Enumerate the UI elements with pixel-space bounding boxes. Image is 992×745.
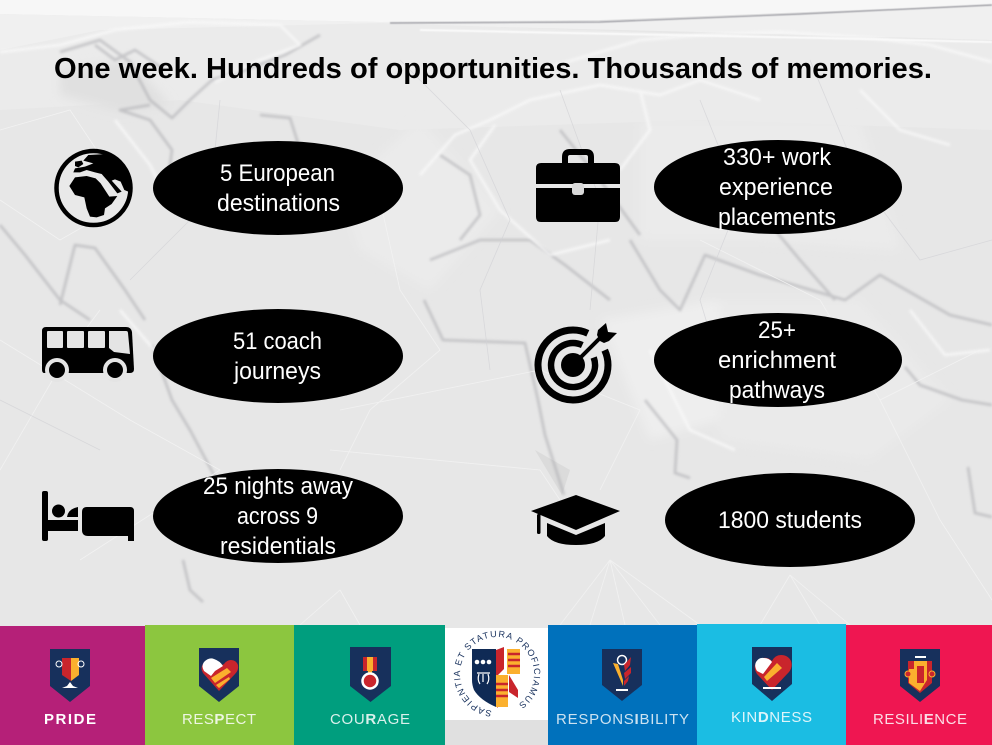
oval: 25 nights away across 9 residentials: across 9 [237, 503, 318, 530]
oval: 330+ work experience placements: 330+ work [723, 144, 832, 171]
grey creases [0, 35, 992, 602]
oval: 1800 students [665, 473, 915, 567]
oval: 1800 students: 1800 students [718, 507, 862, 534]
oval: 51 coach journeys: 51 coach [233, 328, 322, 355]
panel: responsibility: RESPONSIBILITY [556, 711, 689, 728]
icon: target with arrow [538, 323, 617, 400]
icon: briefcase [536, 149, 620, 222]
oval: 51 coach journeys: journeys [233, 358, 321, 385]
panel: kindness [697, 624, 846, 745]
oval: 330+ work experience placements [654, 140, 902, 234]
oval: 5 European destinations [153, 141, 403, 235]
oval: 330+ work experience placements: placements [718, 204, 836, 231]
panel: responsibility [548, 625, 697, 745]
panel: pride: PRIDE [44, 711, 96, 728]
panel: courage [294, 625, 445, 745]
panel: respect [145, 625, 294, 745]
oval: 25+ enrichment pathways [654, 313, 902, 407]
oval: 330+ work experience placements: experience [719, 174, 833, 201]
oval: 25 nights away across 9 residentials [153, 469, 403, 563]
icon: globe [56, 151, 132, 225]
values banner [0, 624, 992, 745]
oval: 25+ enrichment pathways: pathways [729, 377, 825, 404]
oval: 25+ enrichment pathways: 25+ [758, 317, 796, 344]
panel: courage: COURAGE [330, 711, 410, 728]
thin facet lines [0, 110, 992, 625]
oval: 5 European destinations: destinations [217, 190, 340, 217]
top band shadow [390, 5, 992, 23]
panel: resilience [846, 625, 992, 745]
icon: bed [42, 491, 134, 541]
panel: resilience: RESILIENCE [873, 711, 967, 728]
oval: 51 coach journeys [153, 309, 403, 403]
title: One week. Hundreds of opportunities. Thousands of memories. [54, 53, 932, 85]
panel: school crest: SAPIENTIA ET STATURA PROFICIAMUS [454, 630, 540, 716]
oval: 5 European destinations: 5 European [220, 160, 335, 187]
white creases [0, 22, 992, 450]
oval: 25 nights away across 9 residentials: residentials [220, 533, 336, 560]
panel: kindness: KINDNESS [731, 709, 812, 726]
oval: 25+ enrichment pathways: enrichment [718, 347, 836, 374]
icon: bus [42, 327, 134, 382]
panel: respect: RESPECT [182, 711, 256, 728]
panel: pride [0, 626, 145, 745]
icon: graduation cap [531, 495, 620, 545]
oval: 25 nights away across 9 residentials: 25 nights away [203, 473, 353, 500]
